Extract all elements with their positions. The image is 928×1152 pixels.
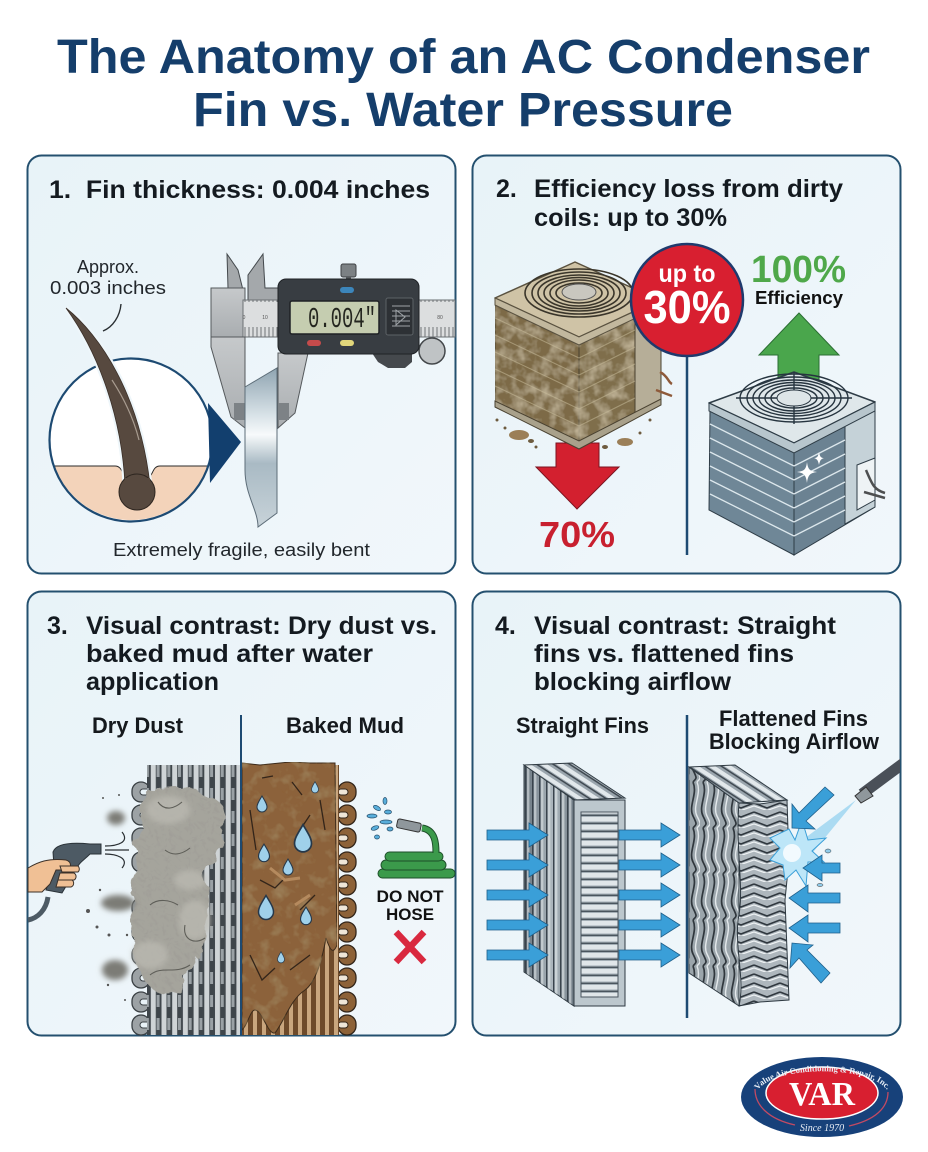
70% label: 70% xyxy=(539,514,615,555)
center divider xyxy=(686,350,688,555)
company logo: VAR xyxy=(789,1076,855,1113)
pointer triangle xyxy=(208,403,241,483)
heading 3: 3. xyxy=(47,612,68,640)
water droplets xyxy=(257,782,318,963)
heading 3 xyxy=(47,612,437,696)
flattened fins label: Flattened Fins xyxy=(719,706,868,731)
hair label: Approx. xyxy=(77,257,139,277)
panel 3: dry dust vs baked mud xyxy=(28,592,456,1036)
100% efficiency label: Efficiency xyxy=(755,288,843,308)
heading 4: blocking airflow xyxy=(534,668,732,696)
heading 2: 2. xyxy=(496,175,517,203)
pressure arrows against fins xyxy=(789,787,840,983)
mud-covered coil xyxy=(242,762,356,1035)
heading 4: fins vs. flattened fins xyxy=(534,640,794,668)
digital caliper: 0 xyxy=(243,315,246,321)
dry dust label: Dry Dust xyxy=(92,713,184,738)
title xyxy=(57,31,870,137)
panel 4: straight vs flattened fins xyxy=(472,592,905,1036)
100% efficiency label: 100% xyxy=(751,249,846,291)
straight fin block xyxy=(524,763,625,1006)
air gun and hand xyxy=(28,832,129,920)
heading 1: 1. Fin thickness: 0.004 inches xyxy=(49,176,430,204)
hair label: 0.003 inches xyxy=(50,278,166,298)
hair label xyxy=(50,257,166,298)
flattened fin block xyxy=(689,765,789,1006)
panel 4 divider xyxy=(686,715,688,1018)
water spray xyxy=(808,800,856,852)
panel 2: efficiency loss xyxy=(472,156,900,574)
magnified hair circle xyxy=(50,308,212,522)
heading 4: 4. xyxy=(495,612,516,640)
heading 2 xyxy=(496,175,843,232)
green up arrow xyxy=(759,313,839,380)
heading 3: Visual contrast: Dry dust vs. xyxy=(86,612,437,640)
heading 2: coils: up to 30% xyxy=(534,204,727,232)
clean condenser unit xyxy=(709,372,885,555)
fin strip xyxy=(245,368,277,527)
digital caliper: 80 xyxy=(437,315,443,321)
dusty coil xyxy=(86,765,241,1035)
callout line to hair xyxy=(103,304,121,331)
title: The Anatomy of an AC Condenser xyxy=(57,31,870,84)
title: Fin vs. Water Pressure xyxy=(193,84,733,137)
dirty condenser unit xyxy=(495,262,672,449)
panel 3 divider xyxy=(240,715,242,1035)
company logo xyxy=(741,1057,903,1137)
red down arrow xyxy=(536,443,619,509)
up to 30% badge xyxy=(631,244,743,356)
company logo: Value Air Conditioning & Repair, Inc. xyxy=(754,1065,888,1090)
flattened fins label xyxy=(709,706,880,754)
do not hose warning: HOSE xyxy=(386,905,434,924)
heading 3: baked mud after water xyxy=(86,640,373,668)
garden hose xyxy=(367,798,455,878)
pressure washer nozzle xyxy=(770,762,905,886)
caption: Extremely fragile, easily bent xyxy=(113,540,370,560)
up to 30% badge: up to xyxy=(658,260,716,288)
heading 4 xyxy=(495,612,837,696)
heading 4: Visual contrast: Straight xyxy=(534,612,837,640)
do not hose warning: DO NOT xyxy=(376,887,444,906)
heading 2: Efficiency loss from dirty xyxy=(534,175,843,203)
company logo: Since 1970 xyxy=(800,1123,844,1134)
digital caliper xyxy=(211,254,455,527)
flattened fins label: Blocking Airflow xyxy=(709,729,880,754)
red x xyxy=(396,932,424,962)
do not hose warning xyxy=(376,887,444,962)
digital caliper: 0.004" xyxy=(308,303,376,336)
digital caliper: 10 xyxy=(262,315,268,321)
up to 30% badge: 30% xyxy=(644,281,730,333)
airflow arrows through straight fins xyxy=(487,823,680,967)
straight fins label: Straight Fins xyxy=(516,713,649,738)
heading 3: application xyxy=(86,668,219,696)
air blast lines xyxy=(105,832,129,868)
panel 1: fin thickness xyxy=(28,156,456,574)
baked mud label: Baked Mud xyxy=(286,713,404,738)
